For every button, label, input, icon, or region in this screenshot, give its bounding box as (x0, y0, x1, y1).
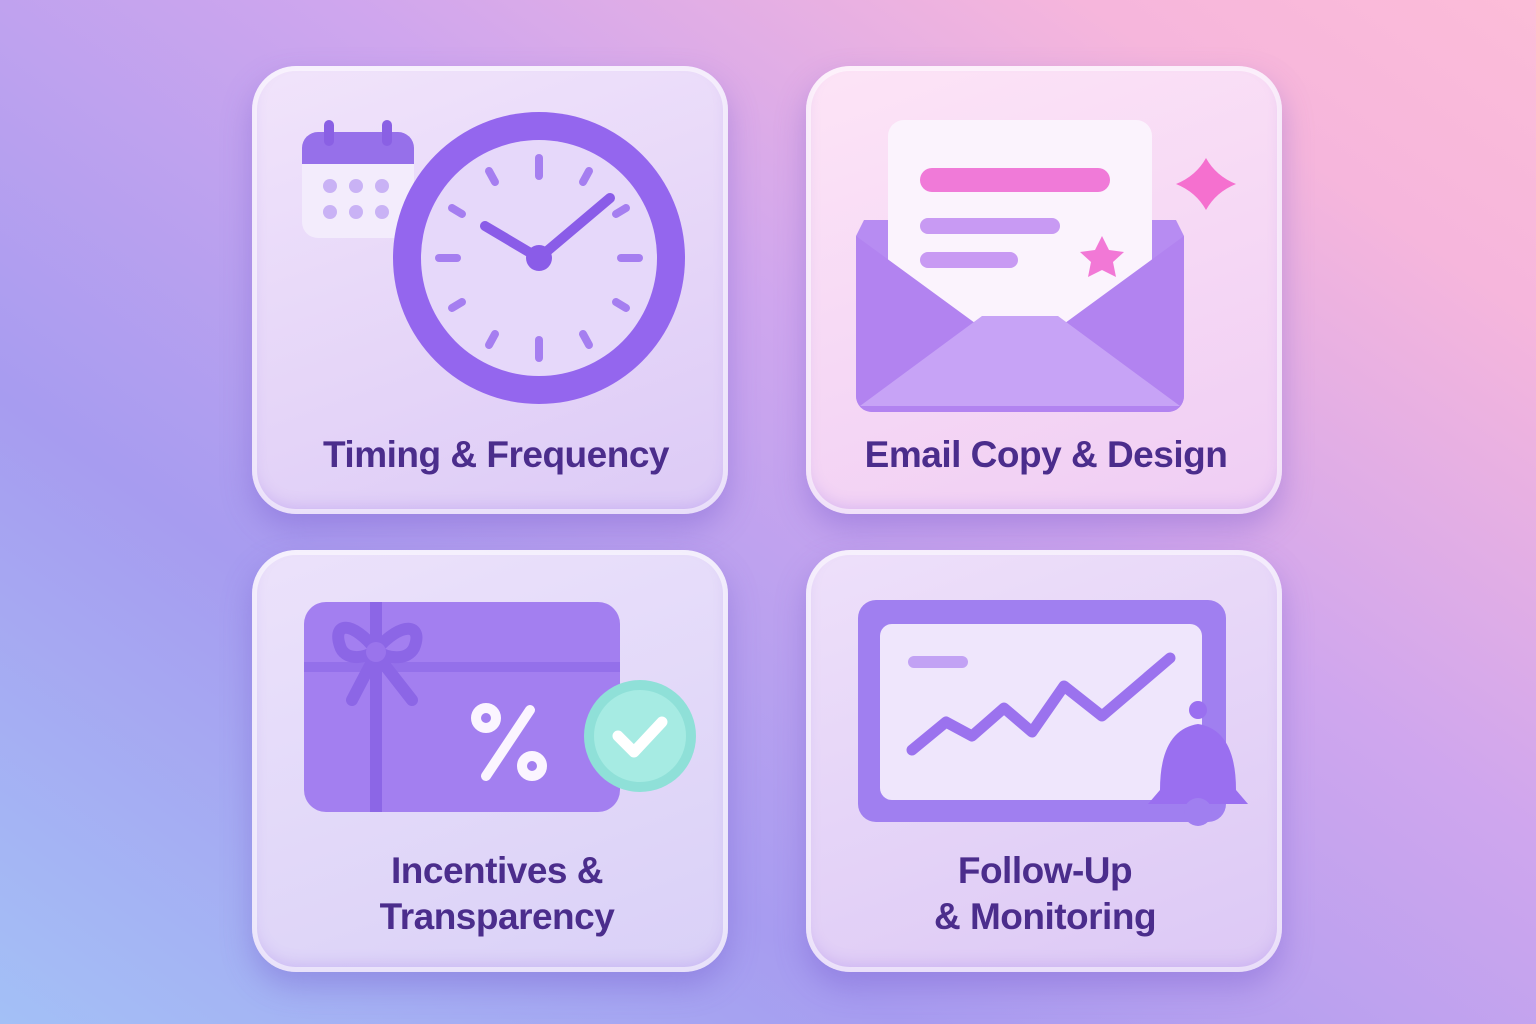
heading: timing & frequency: Timing & Frequency (323, 434, 669, 475)
heading: incentives & transparency (380, 850, 615, 937)
panel: timing & frequency (252, 66, 728, 514)
panel: email copy & design (806, 66, 1282, 514)
heading: follow-up & monitoring: Follow-Up (958, 850, 1132, 891)
heading: follow-up & monitoring (934, 850, 1156, 937)
heading: email copy & design: Email Copy & Design (865, 434, 1227, 475)
panel: incentives & transparency (252, 550, 728, 972)
heading: incentives & transparency: Transparency (380, 896, 614, 937)
panel: follow-up & monitoring (806, 550, 1282, 972)
icon: gift card with check (304, 602, 696, 812)
icon: envelope with letter (856, 120, 1236, 412)
icon: calendar and clock (302, 112, 685, 404)
heading: incentives & transparency: Incentives & (391, 850, 603, 891)
heading: follow-up & monitoring: & Monitoring (934, 896, 1156, 937)
icon: chart screen with bell (858, 600, 1248, 826)
